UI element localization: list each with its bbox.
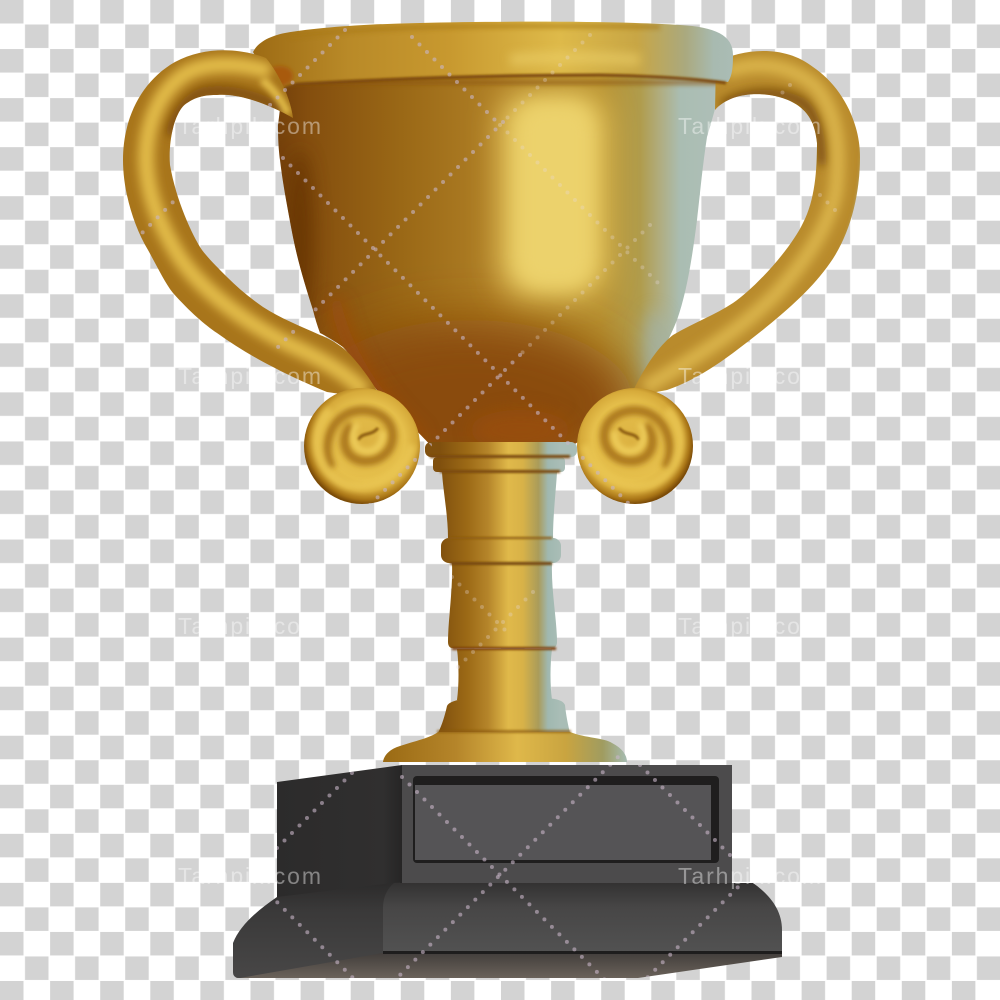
plinth foot side <box>233 882 400 978</box>
plinth foot front <box>383 883 782 953</box>
watermark dotted lines <box>140 28 837 978</box>
plinth upper front <box>402 765 732 886</box>
watermark text: Tarhpik.com <box>178 863 323 889</box>
watermark text: Tarhpik.com <box>178 363 323 389</box>
watermark text: Tarhpik.com <box>178 113 323 139</box>
right handle <box>630 51 865 398</box>
watermark text: Tarhpik.com <box>178 613 323 639</box>
watermark text: Tarhpik.com <box>678 613 823 639</box>
watermark text: Tarhpik.com <box>678 863 823 889</box>
left handle <box>123 50 382 400</box>
watermark text <box>178 113 823 889</box>
stem <box>383 442 627 762</box>
watermark text: Tarhpik.com <box>678 113 823 139</box>
plinth upper side <box>277 765 402 900</box>
plinth underside <box>235 950 782 978</box>
right scroll <box>577 388 693 504</box>
trophy <box>123 22 865 978</box>
nameplate <box>413 776 719 863</box>
trophy foot flare <box>383 732 627 762</box>
left scroll <box>304 388 420 504</box>
cup rim <box>253 22 733 88</box>
cup body <box>278 75 716 444</box>
watermark text: Tarhpik.com <box>678 363 823 389</box>
plinth <box>233 765 782 978</box>
